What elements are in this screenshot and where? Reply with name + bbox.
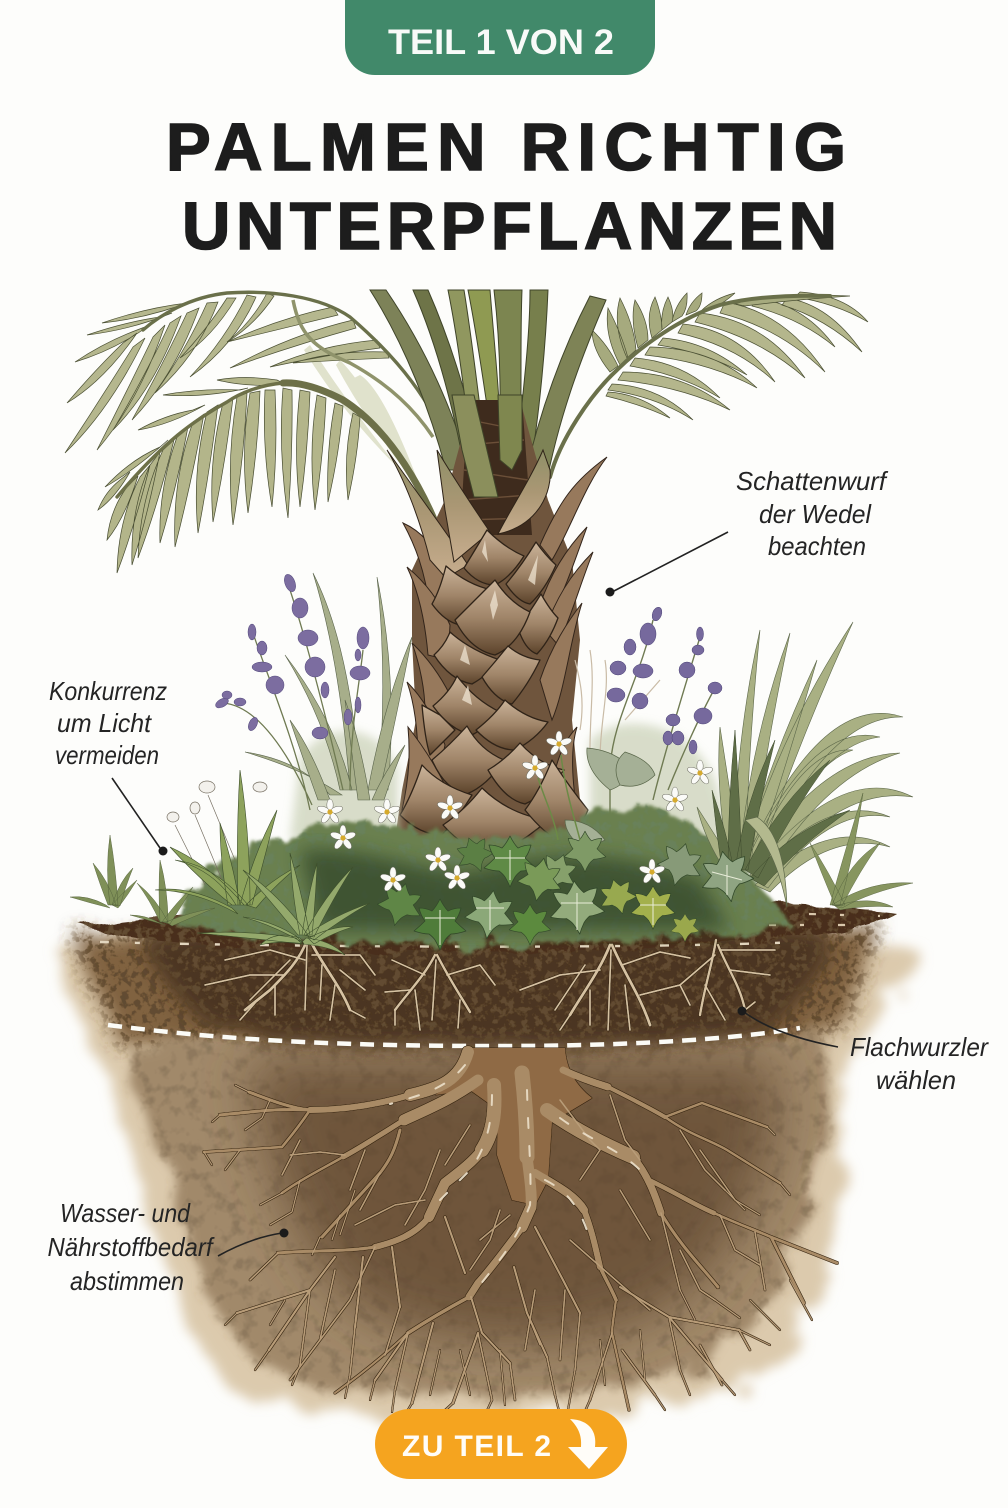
dashed boundary line [108,1025,800,1046]
callout: competition for light: um Licht [57,708,153,738]
palm trunk [387,395,607,860]
trunk: dark fibre core [460,400,532,535]
button: to part 2 [375,1409,627,1479]
soil: surface mulch [80,900,895,952]
frond: right leaflets [550,292,868,477]
soil: pale mulch flecks [100,942,800,947]
frond: inner pale leaflets [304,345,425,500]
callout: shade of fronds: Schattenwurf [736,466,889,496]
ivy leaf veins [425,850,742,945]
title [166,110,846,264]
soil: top humus layer [140,930,830,1047]
callout: competition for light [49,676,168,856]
spider plant [197,853,370,955]
frond: lower left with leaflets [98,378,446,573]
soil: pale mulch flecks right [700,912,880,925]
callout: shade of fronds [606,466,889,596]
lavender right [607,606,722,850]
callout: water and nutrient needs: abstimmen [70,1266,184,1296]
callout: choose shallow-rooted plants: wählen [876,1065,956,1095]
callout: choose shallow-rooted plants [738,1006,989,1095]
grass clump left [155,770,300,914]
root: main stock [435,1048,592,1205]
palm fronds behind [65,290,868,500]
soil: darker centre of the deep layer [250,1060,776,1342]
soil: pale outer wash [55,931,915,1420]
grass clump right [697,622,913,907]
callout: water and nutrient needs: Nährstoffbedarf [48,1232,215,1262]
button: to part 2: ZU TEIL 2 [402,1430,551,1463]
wire flowers left [167,781,267,885]
trunk: frond bases [387,450,550,578]
shallow roots: cluster four [680,940,775,1020]
callout: competition for light: vermeiden [55,740,159,770]
shallow root systems [205,940,775,1030]
trunk: core fibres [462,420,530,520]
badge: part 1 of 2 [345,0,655,75]
callout: water and nutrient needs [48,1198,288,1296]
badge: part 1 of 2: TEIL 1 VON 2 [388,23,614,62]
ivy leaves [373,831,757,950]
title line one: PALMEN RICHTIG [166,110,846,185]
title line two: UNTERPFLANZEN [182,189,837,264]
callout: competition for light: Konkurrenz [49,676,167,706]
illustration: soil cross-section [55,900,915,1420]
flower stems [538,755,580,840]
icon: curved arrow [568,1419,608,1469]
deep root system [204,1048,837,1418]
trunk: light highlights [460,540,538,705]
soil: upper band edges [78,925,880,1045]
trunk: overlapping scales [400,530,588,855]
callout: choose shallow-rooted plants: Flachwurzler [850,1032,989,1062]
root: highlights [390,1065,640,1285]
bed: dark foliage shadows [300,850,730,930]
shallow roots: cluster two [385,955,495,1030]
frond: upper left leaflets [65,292,452,453]
grass clump far right [810,793,913,910]
white flowers [317,731,713,892]
bed: foliage mass [175,806,790,944]
trunk: upper stalks over core [452,395,522,497]
callout: water and nutrient needs: Wasser- und [60,1198,191,1228]
planting bed [70,573,913,955]
trunk: outer spikes [402,457,607,820]
callout: shade of fronds: der Wedel [759,499,872,529]
callout: shade of fronds: beachten [768,531,866,561]
grey-green leaves right [565,748,655,850]
shallow roots: cluster three [520,945,690,1030]
bed: pale background foliage [290,724,740,860]
root: thin branches [204,1085,812,1418]
trunk: silhouette [392,400,592,860]
grass clump far left [70,835,215,926]
root: thick branches [204,1052,837,1410]
shallow roots: cluster one [205,940,375,1020]
fronds: central spikes [370,290,606,490]
pale stems right [575,650,660,760]
soil: deep layer [125,1035,825,1396]
grass blades behind left lavender [245,573,412,800]
lavender left [214,573,370,810]
